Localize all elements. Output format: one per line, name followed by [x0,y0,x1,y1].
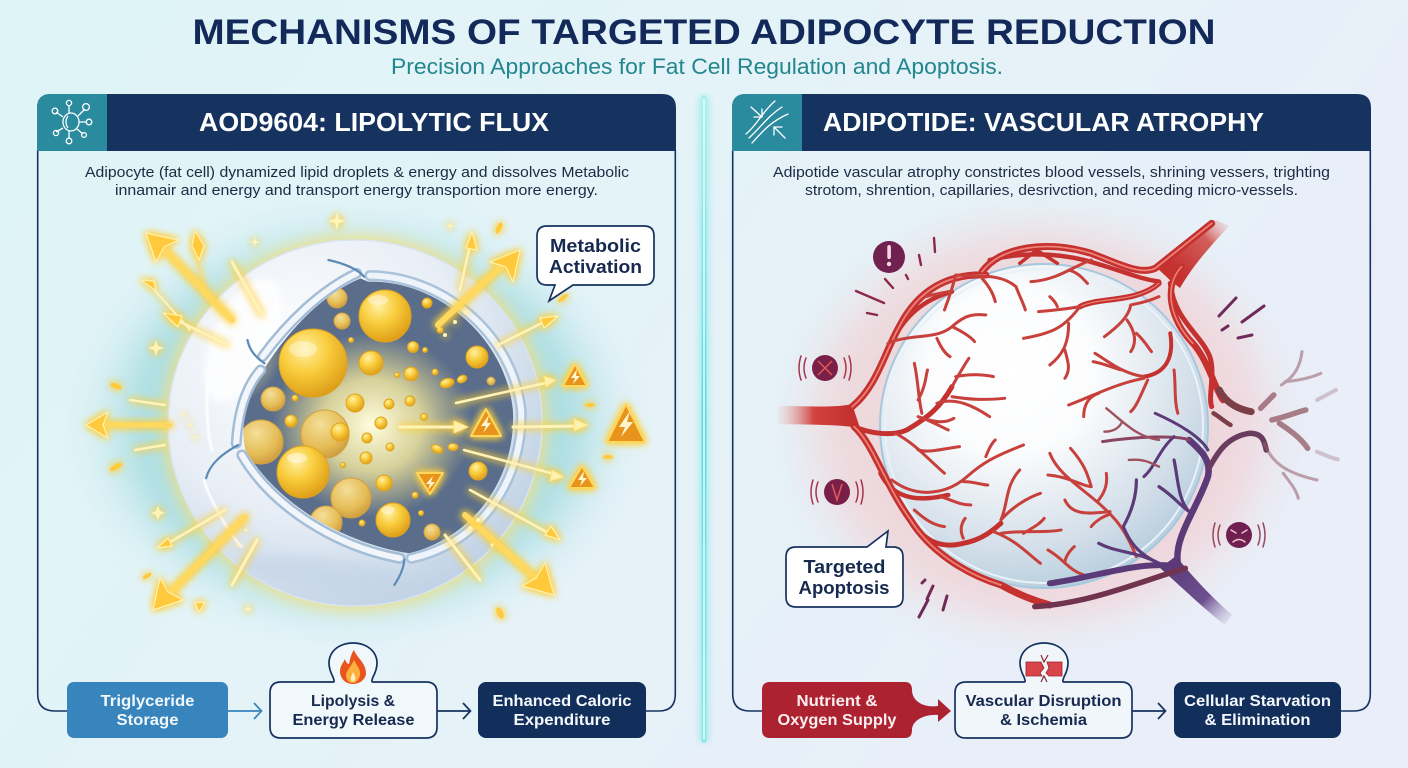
flow: nutrient and oxygen supply [762,682,951,738]
panel description [85,164,630,199]
arrow: disruption to starvation [1132,703,1166,719]
capillary branches [888,260,1178,575]
flow: vascular disruption and ischemia with ruptured vessel icon: Vascular Disruption [966,693,1122,710]
illustration: adipocyte with lipolytic burst [65,199,645,647]
callout: metabolic activation [537,226,654,301]
subtitle: Precision Approaches for Fat Cell Regulation and Apoptosis. [391,54,1003,79]
panel heading: ADIPOTIDE: VASCULAR ATROPHY [823,107,1264,137]
icon: flame [340,650,366,684]
red halo [778,199,1302,651]
panel description: Adipotide vascular atrophy constrictes blood vessels, shrining vessers, trighting [773,164,1330,181]
panel heading: AOD9604: LIPOLYTIC FLUX [199,107,550,137]
panel description: strotom, shrention, capillaries, desrivction, and receding micro-vessels. [805,182,1298,199]
icon: exclamation alert [856,238,935,315]
sparkles and energy particles [109,212,613,620]
flow: lipolysis and energy release with flame icon: Energy Release [292,712,415,729]
flow: vascular disruption and ischemia with ruptured vessel icon: & Ischemia [1000,712,1087,729]
entry trunks [778,220,1232,625]
fat cell sphere [880,264,1208,588]
flow: nutrient and oxygen supply: Oxygen Supply [778,712,897,729]
panel: Adipotide vascular atrophy [732,94,1371,738]
necrotic torn vessels [1214,390,1251,425]
panel description: Adipocyte (fat cell) dynamized lipid droplets & energy and dissolves Metabolic [85,164,630,181]
icon: vibrating blocked vessel [799,355,851,381]
flow: cellular starvation and elimination: Cellular Starvation [1184,693,1331,710]
header icon: constricted vessels [732,94,802,151]
purple venous network [1035,413,1266,607]
center divider [698,95,710,743]
flow: cellular starvation and elimination [1174,682,1341,738]
flow: cellular starvation and elimination: & Elimination [1204,712,1310,729]
title: MECHANISMS OF TARGETED ADIPOCYTE REDUCTION [192,13,1216,52]
golden glow ring [154,226,556,620]
flow: lipolysis and energy release with flame icon [270,643,437,738]
callout: targeted apoptosis: Apoptosis [798,578,890,598]
warning triangles with bolts [417,364,645,494]
callout: metabolic activation: Metabolic [550,236,641,256]
icon: vibrating damaged cell [811,479,863,505]
flow: triglyceride storage: Storage [116,712,179,729]
cell interior [244,278,513,553]
teal halo [65,199,645,647]
flow: triglyceride storage: Triglyceride [100,693,195,710]
arterial network [852,223,1338,607]
panel outline [38,150,675,711]
callout: targeted apoptosis [786,531,903,607]
flow: enhanced caloric expenditure [478,682,646,738]
cell membrane [168,240,542,606]
flow: vascular disruption and ischemia with ruptured vessel icon [955,643,1132,738]
header icon: molecule network [37,94,107,151]
stress dashes [919,298,1264,617]
flow: lipolysis and energy release with flame icon: Lipolysis & [311,693,395,710]
illustration: fat cell with constricted vasculature [778,199,1338,651]
panel description [773,164,1330,199]
lipid droplets [239,288,495,540]
panel outline [733,150,1370,711]
flow: nutrient and oxygen supply: Nutrient & [796,693,878,710]
panel: AOD9604 lipolytic flux [37,94,676,738]
membrane inner rim [204,260,521,585]
arrow: lipolysis to expenditure [437,703,470,719]
panel header bar [732,94,1371,151]
panel description: innamair and energy and transport energy transportion more energy. [115,182,598,199]
flow: enhanced caloric expenditure: Expenditure [514,712,611,729]
callout: metabolic activation: Activation [549,257,642,277]
callout: targeted apoptosis: Targeted [804,557,886,577]
main arteries [852,223,1223,605]
panel header bar [37,94,676,151]
artery highlights [852,223,1212,585]
energy burst arrows [86,231,588,612]
arrow: storage to lipolysis [228,703,262,719]
flow: triglyceride storage [67,682,228,738]
icon: distressed cell face [1213,522,1265,548]
flow: enhanced caloric expenditure: Enhanced Caloric [492,693,632,710]
icon: ruptured vessel [1026,655,1062,682]
